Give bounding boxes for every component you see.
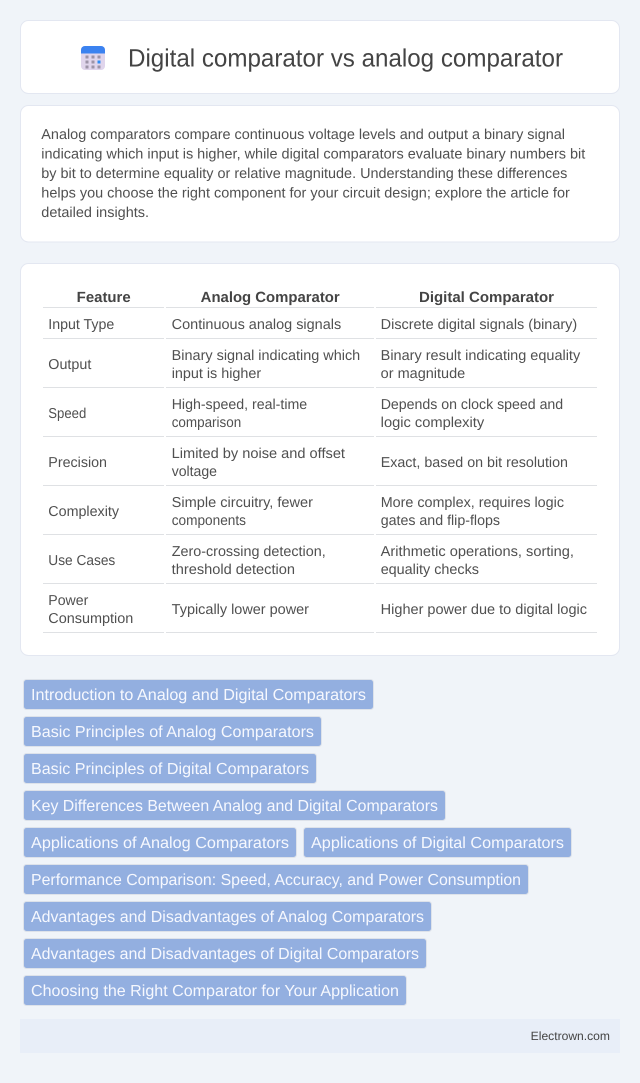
table header row: Feature [77,290,131,306]
chip: performance comparison: Performance Comparison: Speed, Accuracy, and Power Consumption [31,872,521,889]
row: precision: voltage [172,464,217,480]
chip: basic principles analog [24,716,322,746]
row: complexity: More complex, requires logic [381,495,564,511]
row: precision: Limited by noise and offset [172,446,345,462]
row: use cases: equality checks [381,562,479,578]
row: input type: Discrete digital signals (binary) [381,317,577,333]
table header row: Digital Comparator [419,290,554,306]
row: precision: Precision [48,455,107,471]
chip: advantages analog [24,902,432,932]
chip: applications analog [24,828,296,858]
row: output [48,348,581,382]
row: speed: logic complexity [381,415,485,431]
chip: applications digital: Applications of Digital Comparators [311,835,564,852]
row: speed: Depends on clock speed and [381,397,563,413]
row: use cases [48,544,574,578]
row: output: Binary signal indicating which [172,348,360,364]
chip: key differences [24,790,446,820]
row: speed: High-speed, real-time [172,397,307,413]
row: use cases: Zero-crossing detection, [172,544,326,560]
row: output: Binary result indicating equality [381,348,581,364]
row: input type: Continuous analog signals [172,317,341,333]
row: speed [48,397,563,431]
row: complexity: gates and flip-flops [381,513,500,529]
chip: basic principles digital: Basic Principles of Digital Comparators [31,761,309,778]
panel: title header [20,20,620,94]
chip: key differences: Key Differences Between Analog and Digital Comparators [31,798,438,815]
row: use cases: threshold detection [172,562,295,578]
footer [20,1019,620,1053]
row: complexity [48,495,564,529]
chip: choosing the right comparator [24,976,406,1006]
chip: advantages analog: Advantages and Disadvantages of Analog Comparators [31,909,424,926]
chip: choosing the right comparator: Choosing the Right Comparator for Your Application [31,983,399,1000]
icon: calendar grid [81,46,105,70]
table header row [77,290,554,306]
row: use cases: Use Cases [48,553,115,569]
row: output: Output [48,357,91,373]
panel: topic links [24,680,572,1006]
intro paragraph: by bit to determine equality or relative magnitude. Understanding these differences [41,166,567,182]
chip: applications digital [304,828,572,858]
chip: basic principles digital [24,754,316,784]
intro paragraph: helps you choose the right component for your circuit design; explore the article for [41,186,570,202]
row: input type [48,317,577,333]
chip: advantages digital: Advantages and Disadvantages of Digital Comparators [31,946,419,963]
row: input type: Input Type [48,317,114,333]
chip: applications analog: Applications of Analog Comparators [31,835,289,852]
row: precision: Exact, based on bit resolution [381,455,568,471]
panel: comparison table [20,264,620,656]
row: power consumption: Consumption [48,611,133,627]
intro paragraph: indicating which input is higher, while digital comparators evaluate binary numbers bit [41,146,585,162]
chip: advantages digital [24,938,426,968]
title: Digital comparator vs analog comparator [128,44,563,72]
row: power consumption: Typically lower power [172,602,309,618]
chip: performance comparison [24,864,528,894]
row: output: input is higher [172,366,261,382]
row: complexity: Simple circuitry, fewer [172,495,313,511]
table header row: Analog Comparator [201,290,340,306]
row: use cases: Arithmetic operations, sorting, [381,544,574,560]
row: complexity: Complexity [48,504,120,520]
chip: introduction: Introduction to Analog and Digital Comparators [31,687,366,704]
row: complexity: components [172,513,246,529]
row: power consumption [48,593,587,627]
panel: introduction text [20,106,620,242]
row: power consumption: Higher power due to digital logic [381,602,587,618]
intro paragraph: detailed insights. [41,205,149,221]
row: power consumption: Power [48,593,88,609]
chip: introduction [24,680,374,710]
row: precision [48,446,568,480]
row: output: or magnitude [381,366,465,382]
intro paragraph: Analog comparators compare continuous voltage levels and output a binary signal [41,127,565,143]
row: speed: comparison [172,415,241,431]
row: speed: Speed [48,406,86,422]
footer: Electrown.com [531,1029,610,1043]
intro paragraph [41,127,585,221]
chip: basic principles analog: Basic Principles of Analog Comparators [31,724,314,741]
